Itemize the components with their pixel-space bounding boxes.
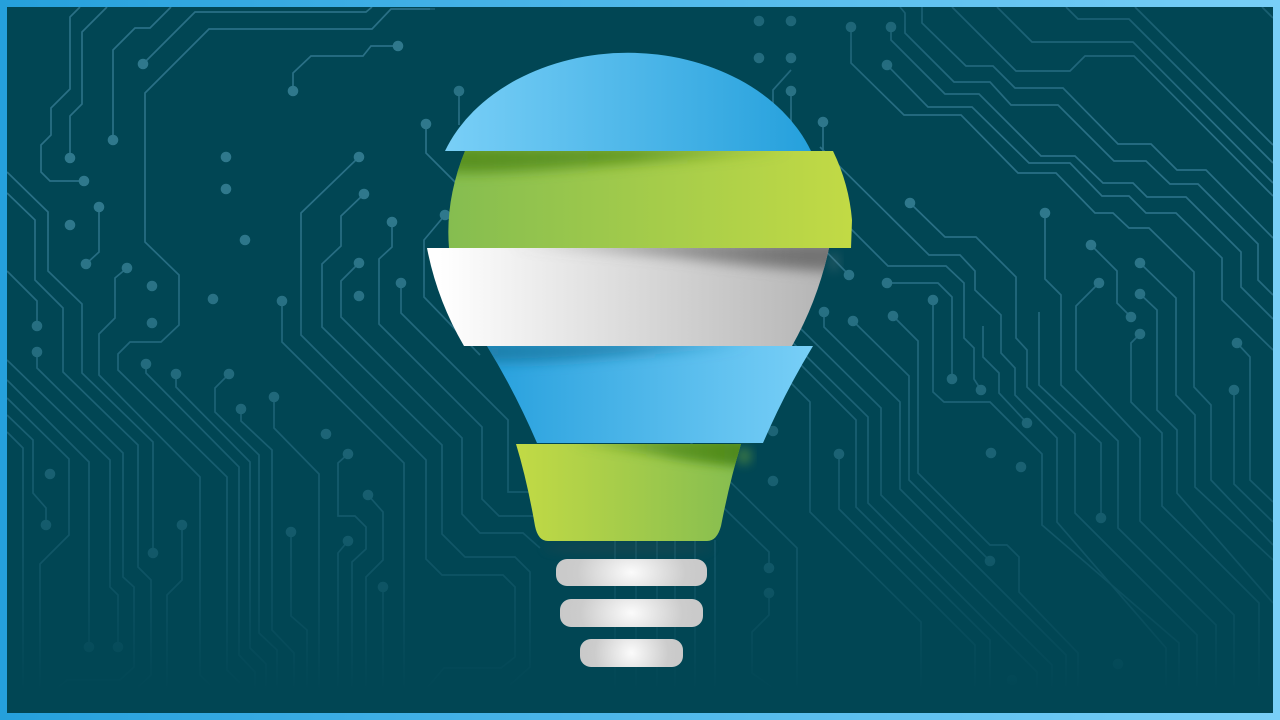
bulb strip 1: blue dome [445, 53, 811, 151]
bulb strip 5: green neck [516, 444, 741, 541]
bulb base thread 2 [560, 599, 703, 627]
light bulb [420, 53, 860, 667]
bulb strip 3: white [420, 242, 840, 346]
bulb glow shadows [543, 252, 840, 554]
bulb strip 2: green [440, 146, 860, 248]
bulb base thread 3 [580, 639, 683, 667]
bulb strip 4: blue [487, 346, 813, 443]
bulb base thread 1 [556, 559, 707, 586]
